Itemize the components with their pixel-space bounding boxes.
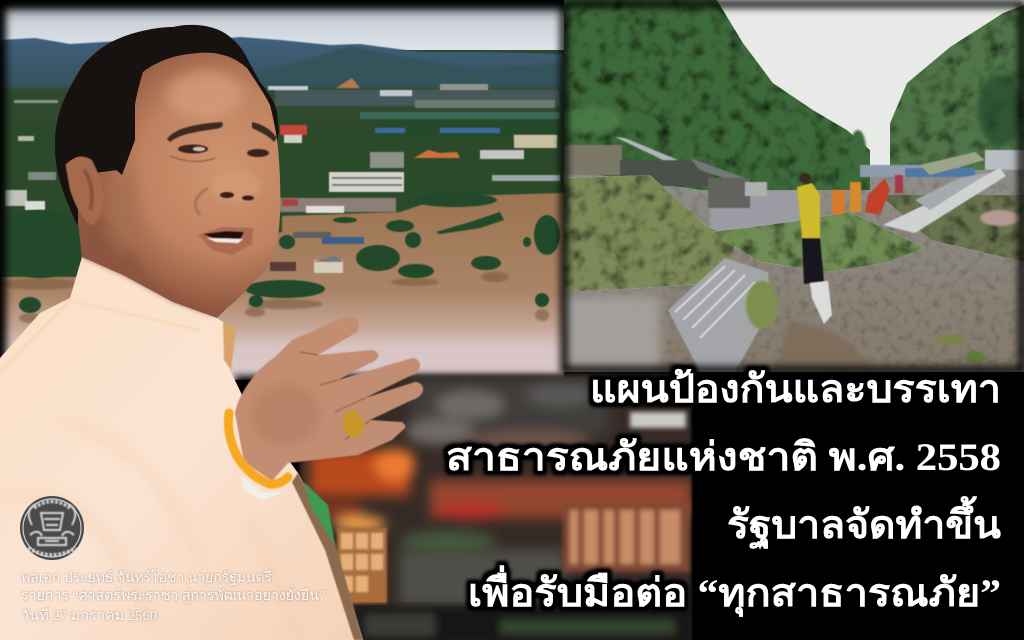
lapel edge — [292, 473, 363, 640]
smoke — [406, 380, 610, 449]
panel: flood photo — [0, 0, 564, 380]
flood photo soft vignette — [0, 0, 580, 392]
shirt collar inner line — [0, 300, 200, 372]
bright smoke patch — [630, 412, 686, 428]
collar fold — [223, 322, 236, 370]
headline text block: แผนป้องกันและบรรเทา — [590, 368, 1001, 411]
hair over ear — [55, 95, 135, 175]
finger creases — [300, 352, 370, 440]
grey blur fade — [564, 288, 666, 372]
man in yellow shirt — [797, 173, 832, 324]
face and neck — [78, 53, 280, 318]
storm photo vignette — [564, 4, 1022, 370]
burning building left — [337, 528, 387, 604]
nose — [212, 170, 260, 202]
flames — [310, 449, 692, 532]
headline text block: เพื่อรับมือต่อ “ทุกสาธารณภัย” — [468, 565, 1001, 617]
orange bracelet — [228, 413, 288, 484]
credit text block: วันที่ 27 มกราคม 2560 — [21, 606, 157, 624]
roadside buildings — [564, 137, 1024, 208]
right trees — [890, 5, 1024, 170]
hand shading — [251, 385, 319, 445]
flood water — [0, 193, 564, 380]
headline text block: สาธารณภัยแห่งชาติ พ.ศ. 2558 — [446, 436, 1001, 479]
black right panel edge — [692, 374, 1024, 640]
city — [5, 78, 560, 213]
forest slope — [564, 0, 870, 190]
brows and eyes — [167, 122, 277, 162]
credit text block: รายการ “ศาสตร์พระราชา สู่การพัฒนาอย่างยั่งยืน” — [21, 586, 325, 604]
cuff — [240, 474, 285, 500]
workers — [832, 175, 903, 215]
corrugated metal foreground — [668, 258, 770, 372]
person — [0, 25, 423, 640]
green pin — [304, 482, 335, 545]
debris piles — [564, 175, 735, 292]
neck shade — [82, 215, 217, 318]
grey lower wall — [400, 550, 565, 606]
hair — [55, 25, 279, 225]
ear — [65, 156, 103, 225]
seal emblem — [20, 496, 84, 560]
tree islands — [0, 193, 560, 313]
bottom shade — [355, 606, 695, 640]
headline text block — [446, 368, 1001, 617]
headline text block: รัฐบาลจัดทำขึ้น — [727, 496, 1001, 550]
ring — [343, 409, 365, 437]
flooded houses — [270, 232, 364, 273]
mountains — [0, 36, 564, 90]
panel: storm damage photo — [548, 0, 1024, 386]
hand — [235, 317, 423, 481]
foreground trees — [400, 530, 496, 554]
shirt folds — [0, 420, 300, 640]
corrugated metal right — [883, 168, 1006, 233]
side shade — [105, 170, 140, 255]
credit text block — [21, 569, 325, 624]
burning building right — [563, 502, 690, 572]
shirt — [0, 257, 363, 640]
forehead highlight — [167, 71, 243, 119]
credit text block: พลเอก ประยุทธ์ จันทร์โอชา นายกรัฐมนตรี — [21, 569, 272, 586]
water reflections — [0, 272, 549, 323]
mouth — [198, 227, 253, 255]
panel: fire photo — [300, 375, 695, 640]
ground — [564, 170, 1024, 372]
